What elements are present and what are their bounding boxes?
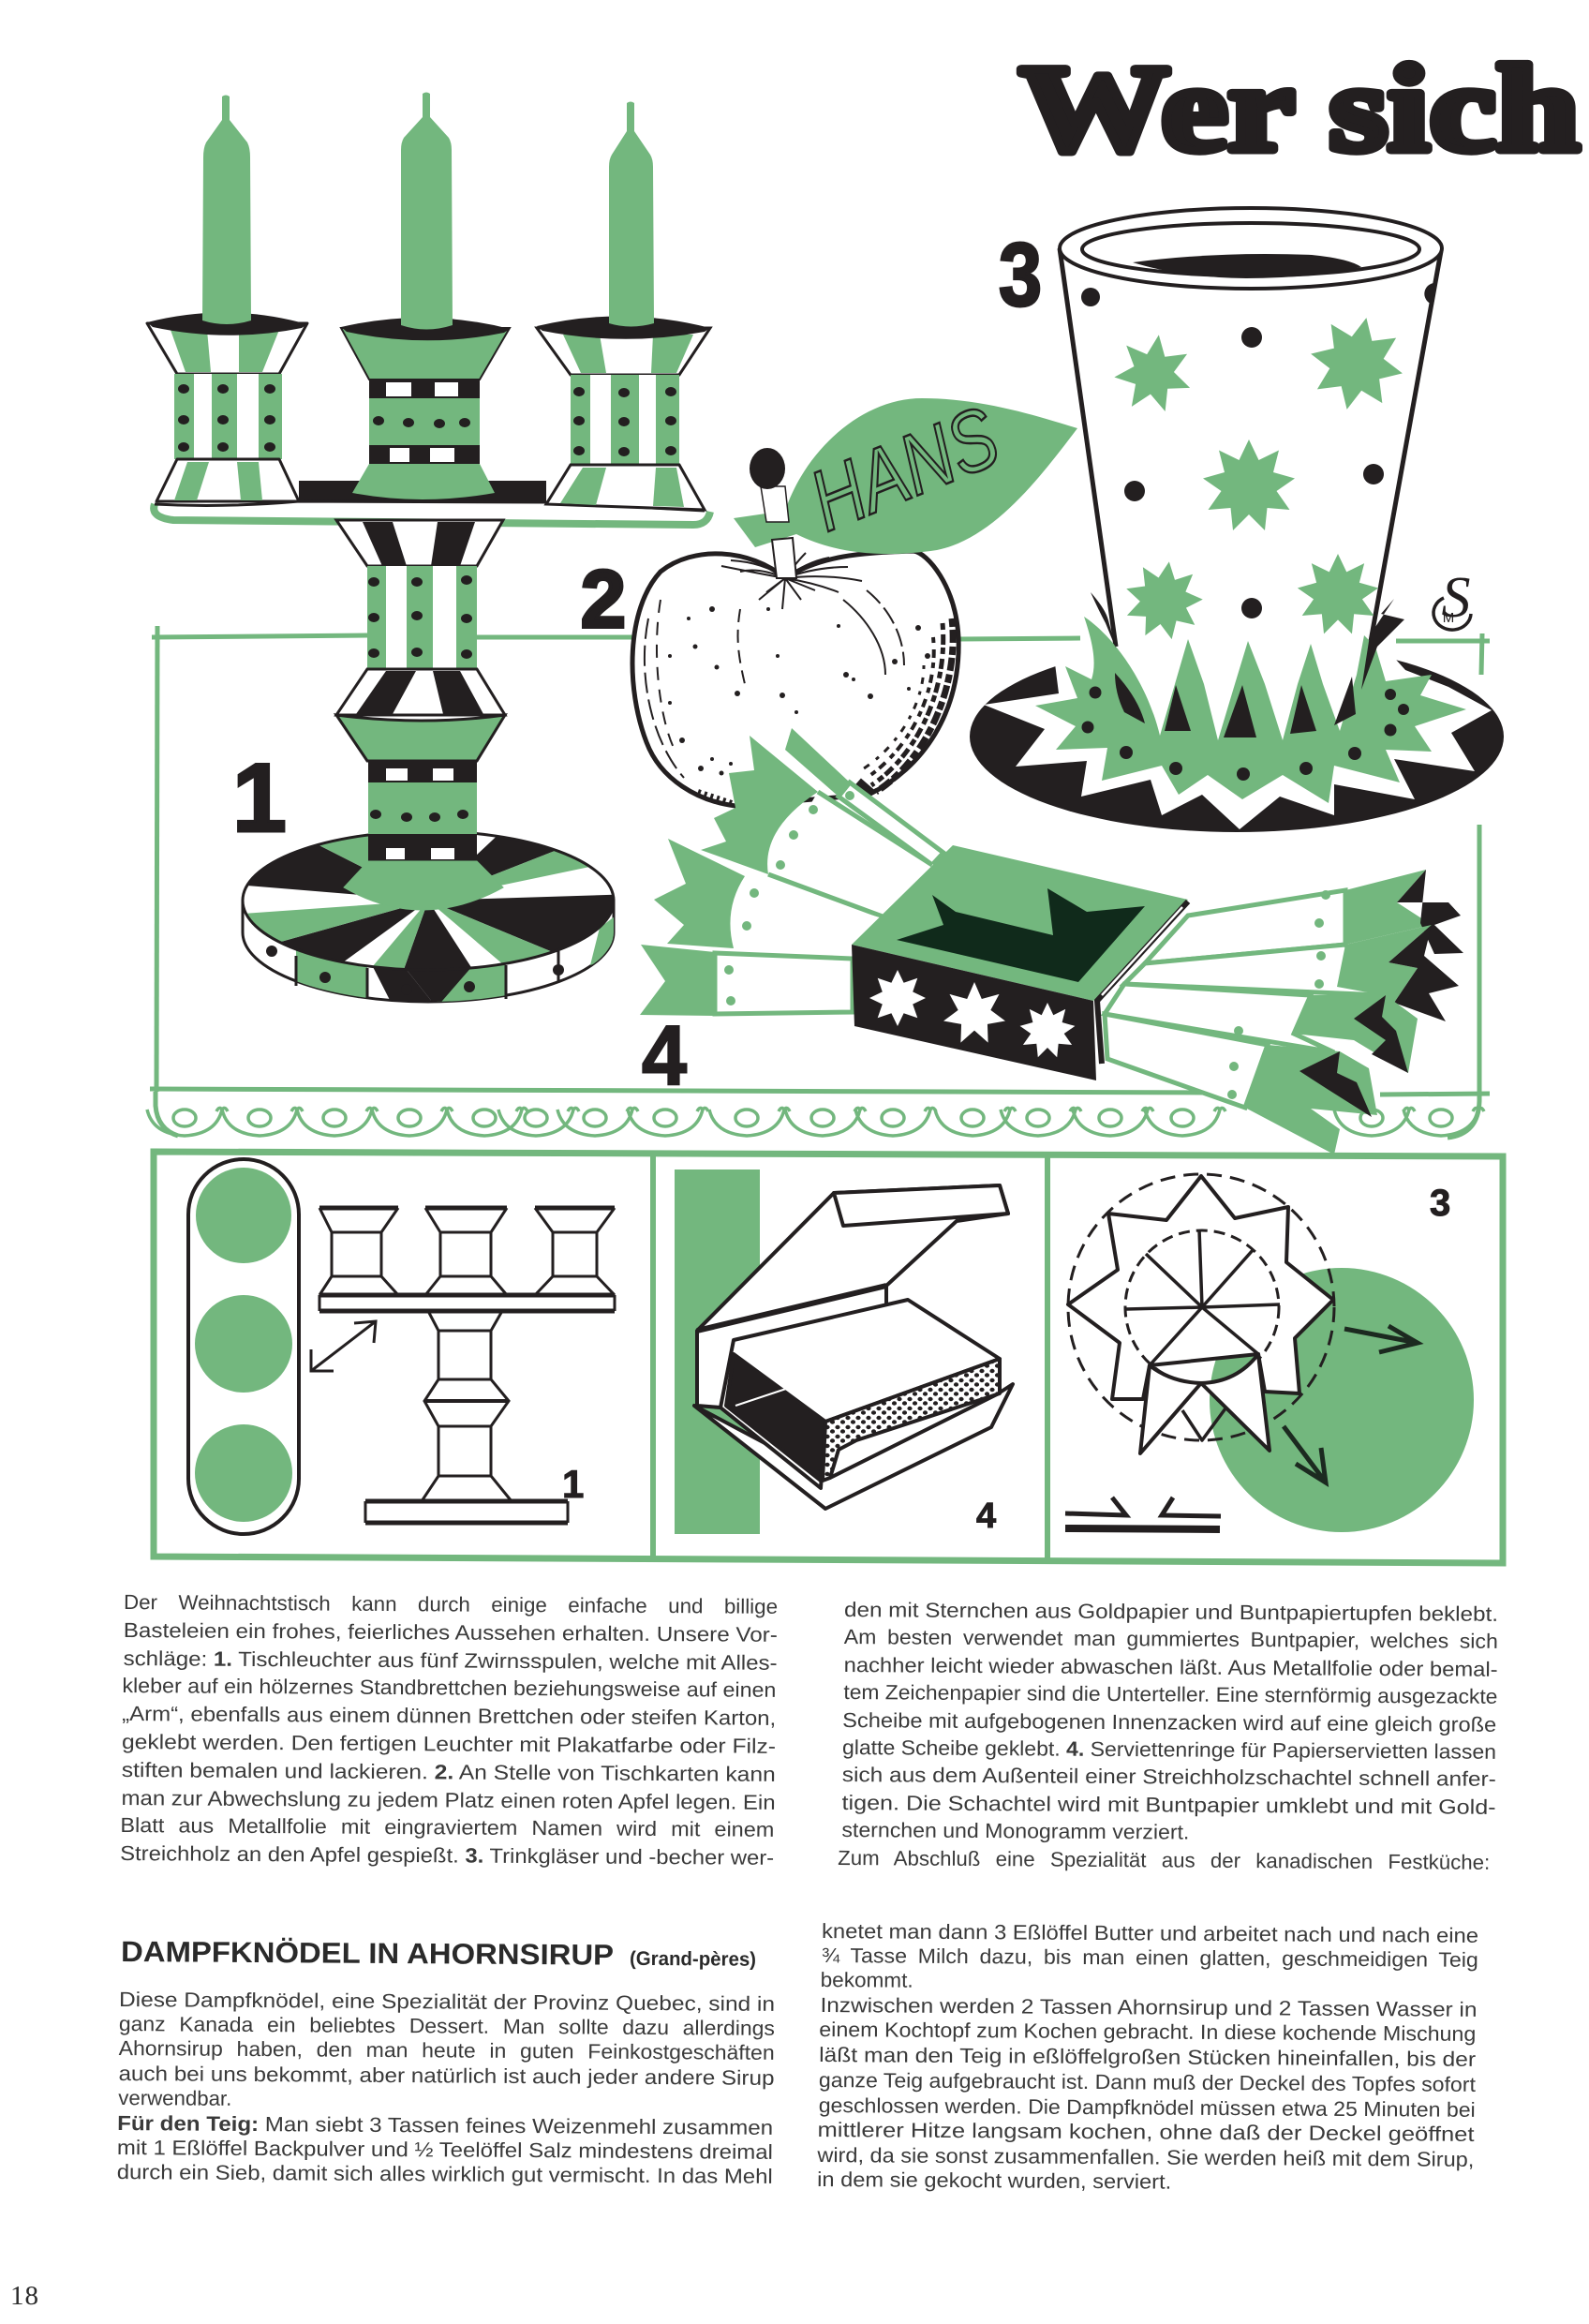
text block: crafts right column: sich aus dem Außenteil einer Streichholzschachtel schnell anfer- [842, 1763, 1496, 1791]
star disc [1068, 1174, 1334, 1453]
matchstick [750, 448, 796, 578]
napkin top [785, 728, 943, 865]
page number: 18 [10, 2281, 39, 2311]
text block: recipe left column: verwendbar. [118, 2086, 231, 2110]
text block: crafts left column: Blatt aus Metallfolie mit eingraviertem Namen wird mit einem [120, 1813, 774, 1841]
text block: recipe left column [117, 1988, 775, 2188]
text block: crafts right column: tem Zeichenpapier sind die Unterteller. Eine sternförmig ausgezackte [843, 1680, 1498, 1708]
text block: recipe right column: in dem sie gekocht wurden, serviert. [817, 2168, 1171, 2194]
label 4: 4 [642, 1009, 687, 1103]
text block: recipe right column [816, 1919, 1478, 2196]
label 1: 1 [232, 744, 287, 853]
napkin middle [654, 839, 883, 951]
lower spool [344, 761, 503, 910]
text block: crafts left column: Streichholz an den Apfel gespießt. 3. Trinkgläser und -becher wer- [120, 1841, 774, 1870]
text block: recipe left column: durch ein Sieb, damit sich alles wirklich gut vermischt. In das Mehl [117, 2160, 773, 2188]
label 2: 2 [581, 555, 626, 645]
text block: recipe right column: ganze Teig aufgebraucht ist. Dann muß der Deckel des Topfes sofort [819, 2068, 1476, 2096]
text block: recipe right column: läßt man den Teig in eßlöffelgroßen Stücken hineinfallen, bis der [819, 2043, 1476, 2071]
text block: crafts left column: kleber auf ein hölzernes Standbrettchen beziehungsweise auf einen [122, 1674, 777, 1702]
text block: recipe right column: mittlerer Hitze langsam kochen, ohne daß der Deckel geöffnet [817, 2118, 1475, 2146]
text block: crafts right column: glatte Scheibe geklebt. 4. Serviettenringe für Papierservietten lassen [842, 1736, 1496, 1764]
napkin lower [640, 945, 853, 1016]
arrows [1284, 1326, 1418, 1482]
text block: recipe right column: geschlossen werden. Die Dampfknödel müssen etwa 25 Minuten bei [819, 2093, 1476, 2122]
text block: crafts left column [120, 1590, 778, 1870]
panel: star saucer construction [1065, 1174, 1474, 1532]
text block: recipe right column: einem Kochtopf zum Kochen gebracht. In diese kochende Mischung [819, 2018, 1476, 2046]
candlestick outline [319, 1208, 615, 1523]
text block: crafts right column: Am besten verwendet man gummiertes Buntpapier, welches sich [844, 1625, 1498, 1653]
recipe heading: DAMPFKNÖDEL IN AHORNSIRUP [121, 1935, 614, 1972]
napkin second right [1124, 945, 1383, 995]
text block: crafts left column: Basteleien ein frohes, feierliches Aussehen erhalten. Unsere Vor- [124, 1618, 778, 1646]
text block: recipe right column: ¾ Tasse Milch dazu, bis man einen glatten, geschmeidigen Teig [822, 1944, 1478, 1972]
candles [202, 92, 654, 330]
box stars [869, 970, 1075, 1057]
base disc [242, 832, 615, 1003]
text block: crafts left column: schläge: 1. Tischleuchter aus fünf Zwirnsspulen, welche mit Alles- [124, 1646, 778, 1675]
instruction frame [154, 1152, 1503, 1563]
text block: crafts right column: den mit Sternchen aus Goldpapier und Buntpapiertupfen beklebt. [844, 1598, 1498, 1626]
text block: recipe left column: ganz Kanada ein beliebtes Dessert. Man sollte dazu allerdings [119, 2012, 775, 2040]
panel number 4: 4 [976, 1497, 996, 1536]
panel number 3: 3 [1430, 1183, 1450, 1224]
monogram: S [1441, 566, 1471, 630]
text block: crafts right column: sternchen und Monogramm verziert. [841, 1818, 1189, 1844]
text block: recipe left column: mit 1 Eßlöffel Backpulver und ½ Teelöffel Salz mindestens dreimal [117, 2136, 773, 2164]
text block: recipe left column: Für den Teig: Man siebt 3 Tassen feines Weizenmehl zusammen [117, 2111, 773, 2139]
double arrow [311, 1321, 376, 1371]
text block: crafts right column: Scheibe mit aufgebogenen Innenzacken wird auf eine gleich große [842, 1708, 1496, 1736]
text block: recipe left column: Ahornsirup haben, den man heute in guten Feinkostgeschäften [119, 2036, 775, 2064]
illustration 1: candlestick [147, 92, 710, 1012]
text block: recipe left column: Diese Dampfknödel, eine Spezialität der Provinz Quebec, sind in [119, 1988, 775, 2016]
napkin upper [701, 736, 937, 918]
plate green star [1035, 592, 1466, 803]
text block: crafts right column: Zum Abschluß eine Spezialität aus der kanadischen Festküche: [838, 1846, 1490, 1874]
text block: crafts left column: „Arm“, ebenfalls aus einem dünnen Brettchen oder steifen Karton, [122, 1702, 776, 1730]
table outline [150, 626, 1490, 1138]
box emblem [897, 888, 1145, 982]
right spool [537, 316, 710, 510]
stem [336, 520, 505, 761]
name on leaf: HANS [797, 389, 1012, 550]
arm shelf [299, 481, 546, 501]
illustration 2: apple with name leaf [632, 389, 1077, 806]
illustration 3: plate [970, 637, 1504, 832]
text block: recipe left column: auch bei uns bekommt, aber natürlich ist auch jeder andere Sirup [118, 2062, 775, 2090]
scalloped table edge [147, 1108, 1484, 1136]
panel number 1: 1 [562, 1462, 584, 1506]
illustration 4: napkin ring, left napkins [640, 728, 943, 1016]
left spool [147, 312, 307, 501]
text block: crafts left column: Der Weihnachtstisch kann durch einige einfache und billige [124, 1590, 778, 1618]
text block: crafts left column: geklebt werden. Den fertigen Leuchter mit Plakatfarbe oder Filz- [122, 1730, 776, 1758]
panel: candlestick pattern [188, 1159, 615, 1534]
napkin bottom right [1105, 1014, 1268, 1108]
apple speckles and shading [645, 553, 953, 806]
illustration 4: right napkins [1105, 870, 1463, 1155]
text block: crafts right column: tigen. Die Schachtel wird mit Buntpapier umklebt und mit Gold- [842, 1791, 1496, 1819]
text block: recipe right column: Inzwischen werden 2 Tassen Ahornsirup und 2 Tassen Wasser in [820, 1993, 1478, 2021]
text block: recipe right column: bekommt. [821, 1968, 913, 1992]
leaf [734, 398, 1077, 554]
apple body [632, 551, 958, 806]
cup stars [1110, 308, 1412, 643]
monogram: M [1443, 610, 1454, 626]
napkin third right [1105, 984, 1334, 1052]
text block: crafts right column: nachher leicht wieder abwaschen läßt. Aus Metallfolie oder bemal- [844, 1653, 1498, 1681]
box line drawing [694, 1185, 1013, 1509]
text block: crafts right column [838, 1598, 1498, 1874]
text block: crafts left column: stiften bemalen und lackieren. 2. An Stelle von Tischkarten kann [122, 1758, 776, 1786]
title: Wer sich [1019, 39, 1580, 177]
napkin top right [1145, 890, 1345, 963]
text block: recipe right column: knetet man dann 3 Eßlöffel Butter und arbeitet nach und nach eine [822, 1919, 1478, 1947]
centre spool [341, 318, 510, 499]
cup dots [1081, 283, 1437, 618]
illustration 3: cup [1060, 208, 1442, 712]
panel: matchbox construction [675, 1169, 1013, 1536]
spool sheet [188, 1159, 299, 1534]
label 3: 3 [999, 225, 1042, 325]
fold symbol [1065, 1497, 1221, 1516]
text block: recipe right column: wird, da sie sonst zusammenfallen. Sie werden heiß mit dem Sirup, [816, 2143, 1474, 2171]
recipe heading: (Grand-pères) [630, 1948, 756, 1971]
text block: crafts left column: man zur Abwechslung zu jedem Platz einen roten Apfel legen. Ein [122, 1786, 776, 1814]
matchbox ring [852, 845, 1188, 1080]
